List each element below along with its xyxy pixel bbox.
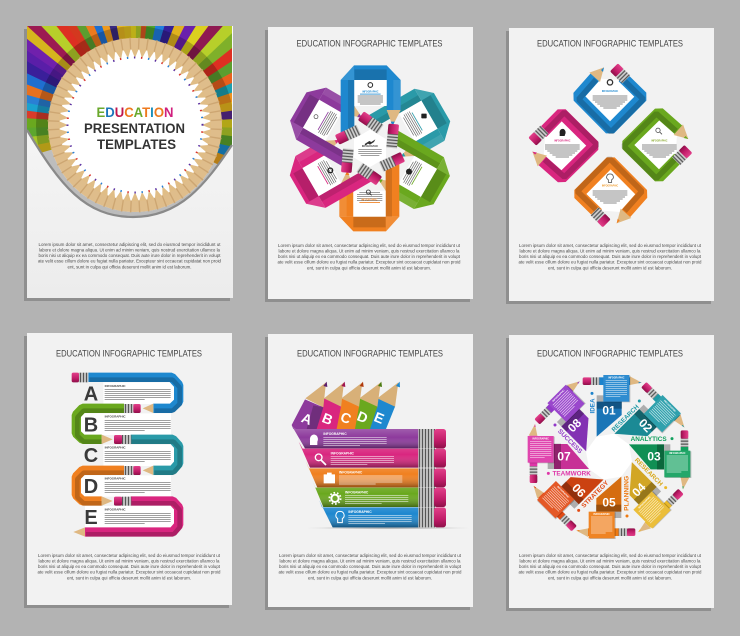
body text: boris nisi ut aliquip ex ea commodo consequat. Duis aute irure dolor in reprehenderit in volupt (278, 254, 461, 259)
row text: INFOGRAPHIC (105, 507, 126, 511)
body text: ate velit esse cillum dolore eu fugiat nulla pariatur. Excepteur sint occaecat cupidatat non proid (518, 260, 702, 265)
orange diamond content (593, 174, 627, 203)
pink diamond content: INFOGRAPHIC (554, 139, 571, 142)
step cards: INFOGRAPHIC (669, 452, 686, 455)
stacked pencil diagram (292, 382, 472, 529)
letters: B (84, 414, 98, 436)
row: orange (306, 461, 446, 487)
panel: flower of six pencils (265, 27, 473, 302)
step cards: INFOGRAPHIC (608, 376, 625, 379)
step labels (552, 398, 667, 511)
pencil A blue (72, 373, 180, 413)
step cards: INFOGRAPHIC (556, 485, 570, 499)
body text: ent, sunt in culpa qui officia deserunt mollit anim id est laborum. (67, 576, 191, 581)
tip letters (299, 408, 387, 428)
pencil C teal (114, 435, 180, 475)
step numbers: 03 (647, 449, 661, 463)
pencil E pink (73, 497, 180, 537)
text cards (81, 382, 174, 528)
tip letters: D (355, 408, 370, 426)
body text: boris nisi ut aliquip ex ea commodo consequat. Duis aute irure dolor in reprehenderit in volupt (38, 564, 221, 569)
step numbers: 04 (629, 480, 649, 500)
heading: EDUCATION INFOGRAPHIC TEMPLATES (297, 348, 443, 358)
step cards (528, 375, 691, 539)
eraser hexagon: INFOGRAPHIC (362, 145, 378, 148)
step labels: ANALYTICS (631, 436, 667, 443)
heading: EDUCATION INFOGRAPHIC TEMPLATES (537, 38, 683, 48)
step numbers: 08 (565, 416, 584, 435)
step labels: IDEA (589, 398, 596, 413)
step labels: RESEARCH (611, 403, 641, 434)
body text (278, 553, 462, 581)
row text: INFOGRAPHIC (105, 415, 126, 419)
body text (38, 553, 221, 581)
row: blue: INFOGRAPHIC (348, 510, 372, 514)
body text: boris nisi ut aliquip ex ea commodo consequat. Duis aute irure dolor in reprehenderit in volupt (519, 564, 702, 569)
body text: ate velit esse cillum dolore eu fugiat nulla pariatur. Excepteur sint occaecat cupidatat non proid (278, 260, 461, 265)
step cards: INFOGRAPHIC (552, 389, 566, 403)
body text: Lorem ipsum dolor sit amet, consectetur adipiscing elit, sed do eiusmod tempor incididunt ut (519, 243, 702, 248)
body text: boris nisi ut aliquip ex ea commodo consequat. Duis aute irure dolor in reprehenderit in volupt (279, 564, 462, 569)
step numbers: 02 (636, 416, 655, 435)
body text: ent, sunt in culpa qui officia deserunt mollit anim id est laborum. (548, 576, 672, 581)
step labels: STRATEGY (580, 479, 611, 510)
cover body text: Lorem ipsum dolor sit amet, consectetur adipiscing elit, sed do eiusmod tempor incididunt ut (38, 242, 221, 247)
cover title: EDUCATION (96, 105, 174, 120)
heading: EDUCATION INFOGRAPHIC TEMPLATES (56, 348, 202, 358)
arm labels and icons: INFOGRAPHIC (361, 198, 378, 201)
body text (518, 243, 702, 271)
row: purple: INFOGRAPHIC (323, 432, 347, 436)
step cards: INFOGRAPHIC (533, 437, 549, 440)
heading: EDUCATION INFOGRAPHIC TEMPLATES (296, 38, 442, 48)
cover title: TEMPLATES (97, 137, 176, 152)
step labels: PLANNING (624, 476, 631, 511)
body text: labore et dolore magna aliqua. Ut enim ad minim veniam, quis nostrud exercitation ullamco la (280, 558, 461, 563)
arm labels and icons (314, 83, 427, 201)
row: blue (319, 501, 446, 527)
cover body text (38, 242, 222, 270)
letters (84, 383, 98, 529)
body text: ate velit esse cillum dolore eu fugiat nulla pariatur. Excepteur sint occaecat cupidatat non proid (278, 570, 462, 575)
step cards: INFOGRAPHIC (663, 399, 677, 413)
snake diagram (72, 373, 180, 537)
pencil tips A to E (292, 382, 400, 429)
fan of coloured pencils (27, 26, 232, 216)
pencil B green (76, 404, 141, 444)
body text (278, 243, 461, 271)
row: green: INFOGRAPHIC (345, 490, 369, 494)
letters: D (84, 476, 98, 498)
row: green (312, 481, 446, 507)
pink diamond content (545, 129, 580, 157)
cover body text: ent, sunt in culpa qui officia deserunt mollit anim id est laborum. (68, 265, 192, 270)
step cards: INFOGRAPHIC (594, 513, 610, 516)
wheel diagram (528, 375, 691, 539)
body text: Lorem ipsum dolor sit amet, consectetur adipiscing elit, sed do eiusmod tempor incididunt ut (278, 243, 461, 248)
green diamond content (642, 128, 677, 157)
row text: INFOGRAPHIC (105, 476, 126, 480)
wooden pencil ring (48, 38, 222, 212)
tip letters: A (299, 409, 315, 428)
step numbers (557, 403, 661, 510)
body text: Lorem ipsum dolor sit amet, consectetur adipiscing elit, sed do eiusmod tempor incididunt ut (38, 553, 221, 558)
tip letters: C (338, 408, 354, 427)
body text: Lorem ipsum dolor sit amet, consectetur adipiscing elit, sed do eiusmod tempor incididunt ut (279, 553, 462, 558)
arm labels and icons: INFOGRAPHIC (362, 90, 379, 93)
body text: labore et dolore magna aliqua. Ut enim ad minim veniam, quis nostrud exercitation ullamco la (520, 558, 701, 563)
body text (518, 553, 702, 581)
panel: four pencil diamonds (506, 28, 714, 304)
cover body text: labore et dolore magna aliqua. Ut enim ad minim veniam, quis nostrud exercitation ullamco la (39, 248, 221, 253)
panel: eight step pencil wheel (506, 335, 714, 611)
row text (105, 384, 171, 523)
body text: ent, sunt in culpa qui officia deserunt mollit anim id est laborum. (548, 266, 672, 271)
row: purple (292, 427, 446, 448)
eraser hexagon (331, 111, 409, 185)
cover body text: boris nisi ut aliquip ex ea commodo consequat. Duis aute irure dolor in reprehenderit in volupt (38, 253, 221, 258)
blue diamond content (593, 80, 627, 108)
cover title: PRESENTATION (84, 121, 185, 136)
panel: A to E pencil snake (24, 333, 232, 608)
step labels: TEAMWORK (552, 471, 591, 478)
cover body text: ate velit esse cillum dolore eu fugiat nulla pariatur. Excepteur sint occaecat cupidatat non proid (38, 259, 222, 264)
blue diamond content: INFOGRAPHIC (602, 90, 618, 93)
panel: cover page (24, 26, 233, 301)
green diamond content: INFOGRAPHIC (651, 139, 668, 142)
body text: Lorem ipsum dolor sit amet, consectetur adipiscing elit, sed do eiusmod tempor incididunt ut (519, 553, 702, 558)
row text: INFOGRAPHIC (105, 445, 126, 449)
tip letters: B (320, 409, 335, 428)
step numbers: 07 (557, 449, 571, 463)
step cards: INFOGRAPHIC (638, 496, 652, 509)
heading: EDUCATION INFOGRAPHIC TEMPLATES (537, 348, 683, 358)
orange diamond content: INFOGRAPHIC (602, 185, 618, 188)
diamond diagram (528, 63, 692, 227)
label dots (547, 392, 673, 517)
step labels: RESEARCH (633, 457, 664, 488)
body text: ate velit esse cillum dolore eu fugiat nulla pariatur. Excepteur sint occaecat cupidatat non proid (38, 570, 221, 575)
letters: C (84, 445, 98, 467)
body text: ent, sunt in culpa qui officia deserunt mollit anim id est laborum. (307, 266, 431, 271)
body text: boris nisi ut aliquip ex ea commodo consequat. Duis aute irure dolor in reprehenderit in volupt (519, 254, 702, 259)
step numbers: 01 (602, 403, 616, 417)
tip letters: E (372, 409, 387, 427)
step labels: SUCCESS (556, 428, 583, 455)
body text: ent, sunt in culpa qui officia deserunt mollit anim id est laborum. (308, 576, 432, 581)
row text: INFOGRAPHIC (105, 384, 126, 388)
row: pink (299, 442, 446, 468)
body text: ate velit esse cillum dolore eu fugiat nulla pariatur. Excepteur sint occaecat cupidatat non proid (518, 570, 702, 575)
letters: E (84, 507, 98, 529)
curved silver edge (27, 130, 232, 217)
cover title (84, 105, 185, 152)
body text: labore et dolore magna aliqua. Ut enim ad minim veniam, quis nostrud exercitation ullamco la (520, 248, 701, 253)
row: pink: INFOGRAPHIC (331, 451, 355, 455)
letters: A (84, 383, 98, 405)
row: orange: INFOGRAPHIC (339, 471, 363, 475)
body text: labore et dolore magna aliqua. Ut enim ad minim veniam, quis nostrud exercitation ullamco la (278, 248, 460, 253)
body text: labore et dolore magna aliqua. Ut enim ad minim veniam, quis nostrud exercitation ullamco la (38, 558, 220, 563)
flower diagram (283, 65, 457, 231)
panel: stacked pencils (265, 334, 473, 610)
step numbers: 06 (569, 481, 589, 500)
pencil D orange (76, 466, 141, 506)
step numbers: 05 (602, 496, 616, 510)
